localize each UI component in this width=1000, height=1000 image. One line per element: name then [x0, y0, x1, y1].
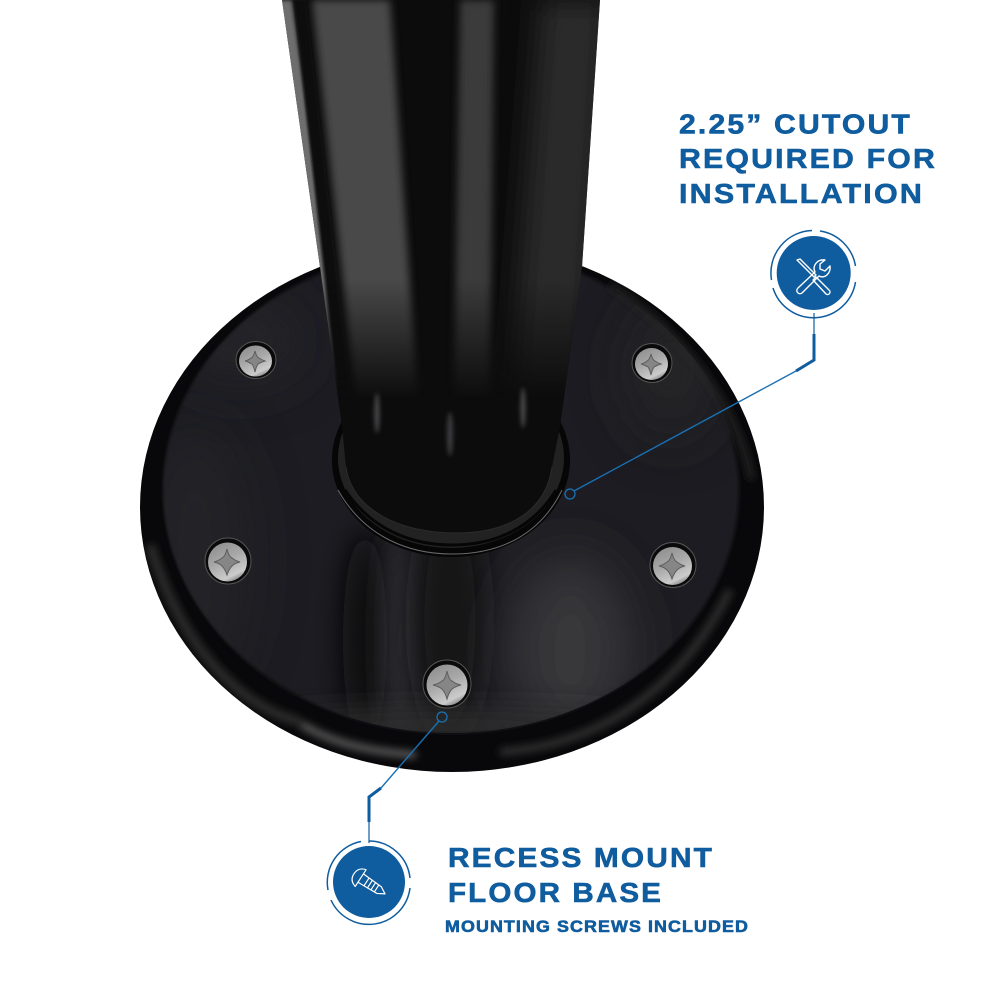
screw: upper left: [236, 342, 276, 378]
post: [270, 0, 610, 533]
arrow: cutout leader: [565, 313, 814, 499]
arrow: recess mount leader: [369, 712, 447, 843]
heading: cutout: [679, 108, 937, 209]
heading: recess mount: RECESS MOUNT: [448, 842, 714, 873]
caption: screws included: MOUNTING SCREWS INCLUDED: [445, 918, 749, 936]
heading: cutout: INSTALLATION: [679, 178, 924, 209]
screw: upper right: [632, 344, 672, 382]
screw: bottom: [423, 660, 471, 708]
heading: recess mount: FLOOR BASE: [448, 877, 663, 908]
heading: cutout: 2.25” CUTOUT: [679, 108, 912, 140]
icon: screw badge: [327, 841, 410, 924]
heading: recess mount: [448, 842, 714, 908]
screw: middle right: [650, 542, 696, 588]
screw: middle left: [205, 538, 251, 584]
heading: cutout: REQUIRED FOR: [679, 143, 937, 174]
floor base plate: [140, 242, 764, 772]
mounting ring around post: [332, 363, 570, 557]
icon: tools badge: [771, 230, 856, 318]
